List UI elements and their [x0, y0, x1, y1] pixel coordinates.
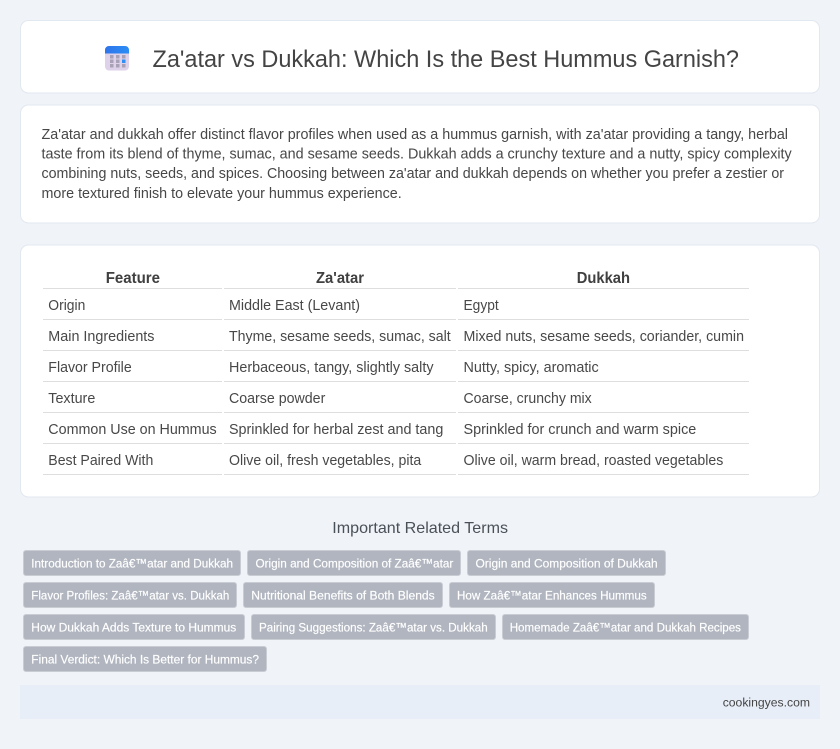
table row: common use on hummus: Sprinkled for herbal zest and tang	[229, 422, 443, 438]
table row: texture	[43, 391, 749, 413]
tag	[24, 614, 244, 640]
table header row: Za'atar	[316, 270, 364, 287]
table row: origin: Origin	[48, 298, 85, 314]
tag: Final Verdict: Which Is Better for Hummus?	[31, 652, 259, 666]
table row: texture: Texture	[48, 391, 95, 407]
header panel	[20, 20, 820, 93]
table row: flavor profile	[43, 360, 749, 382]
tag	[24, 582, 236, 608]
footer	[20, 685, 820, 719]
table header row: Dukkah	[577, 270, 630, 287]
table header row: Feature	[106, 270, 160, 287]
table row: flavor profile: Nutty, spicy, aromatic	[464, 360, 599, 376]
table row: origin: Middle East (Levant)	[229, 298, 360, 314]
table row: best paired with: Olive oil, warm bread, roasted vegetables	[464, 453, 723, 469]
tag	[248, 550, 460, 576]
table row: best paired with: Best Paired With	[48, 453, 153, 469]
table row: main ingredients	[43, 329, 749, 351]
table row: main ingredients: Thyme, sesame seeds, sumac, salt	[229, 329, 451, 345]
tag: How Zaâ€™atar Enhances Hummus	[457, 588, 647, 602]
tag: How Dukkah Adds Texture to Hummus	[31, 620, 236, 634]
tag	[24, 646, 266, 672]
tag: Origin and Composition of Dukkah	[476, 556, 658, 570]
table row: main ingredients: Main Ingredients	[48, 329, 154, 345]
tag	[468, 550, 666, 576]
tag	[244, 582, 442, 608]
tag	[502, 614, 748, 640]
summary text: more textured finish to elevate your hummus experience.	[42, 186, 402, 202]
panel: summary	[20, 105, 820, 223]
table row: texture: Coarse powder	[229, 391, 325, 407]
table row: origin: Egypt	[464, 298, 499, 314]
tag	[450, 582, 654, 608]
tag: Origin and Composition of Zaâ€™atar	[256, 556, 453, 570]
table row: flavor profile: Herbaceous, tangy, slightly salty	[229, 360, 434, 376]
panel: comparison table	[20, 245, 820, 497]
tag: Nutritional Benefits of Both Blends	[251, 588, 435, 602]
table row: common use on hummus	[43, 422, 749, 444]
tag: Flavor Profiles: Zaâ€™atar vs. Dukkah	[31, 588, 229, 602]
summary text	[42, 127, 793, 202]
table row: texture: Coarse, crunchy mix	[464, 391, 592, 407]
tag	[24, 550, 240, 576]
summary text: combining nuts, seeds, and spices. Choosing between za'atar and dukkah depends on whether you prefer a zestier or	[42, 166, 784, 182]
related term tags	[24, 550, 748, 672]
icon: calendar	[105, 46, 129, 70]
tag: Introduction to Zaâ€™atar and Dukkah	[31, 556, 233, 570]
table row: best paired with	[43, 453, 749, 475]
tag: Pairing Suggestions: Zaâ€™atar vs. Dukkah	[259, 620, 488, 634]
title: Za'atar vs Dukkah: Which Is the Best Hummus Garnish?	[152, 46, 739, 73]
tag	[252, 614, 496, 640]
heading: important related terms: Important Related Terms	[332, 520, 508, 537]
tag: Homemade Zaâ€™atar and Dukkah Recipes	[510, 620, 741, 634]
footer source: cookingyes.com	[723, 696, 810, 710]
table row: origin	[43, 298, 749, 320]
summary text: Za'atar and dukkah offer distinct flavor profiles when used as a hummus garnish, with za'atar providing a tangy, herbal	[42, 127, 788, 143]
table row: best paired with: Olive oil, fresh vegetables, pita	[229, 453, 421, 469]
summary text: taste from its blend of thyme, sumac, and sesame seeds. Dukkah adds a crunchy texture and a nutty, spicy complexity	[42, 147, 793, 163]
table row: common use on hummus: Common Use on Hummus	[48, 422, 217, 438]
table row: main ingredients: Mixed nuts, sesame seeds, coriander, cumin	[464, 329, 744, 345]
table row: flavor profile: Flavor Profile	[48, 360, 132, 376]
table header row	[43, 270, 749, 289]
table row: common use on hummus: Sprinkled for crunch and warm spice	[464, 422, 696, 438]
